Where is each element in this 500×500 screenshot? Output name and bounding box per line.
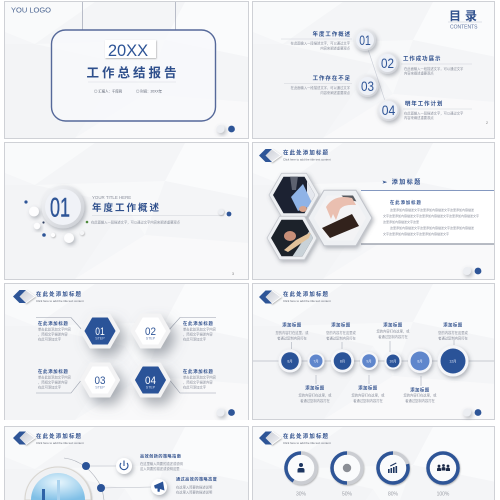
step 2 text bbox=[183, 320, 217, 342]
slide header: 在此处添加标题 bbox=[283, 148, 329, 156]
top labels: 您的内容打在这里或 bbox=[326, 330, 357, 335]
timeline node 2: 7月 bbox=[313, 360, 319, 364]
ring 50% bbox=[332, 453, 362, 498]
timeline node 7: 12月 bbox=[449, 360, 457, 364]
cover title: 工作总结报告 bbox=[86, 65, 180, 80]
item 04: 04 bbox=[382, 102, 395, 118]
step 4 text: 在此可添加文字 bbox=[183, 384, 207, 390]
step 04 hexagon: 04 bbox=[145, 375, 156, 387]
photo: suit with folder bbox=[269, 173, 319, 217]
item 02: 工作成功展示 bbox=[403, 54, 441, 62]
top labels: 者通过复制内容打在 bbox=[277, 336, 308, 340]
item 01: 01 bbox=[359, 32, 371, 48]
icon: megaphone bbox=[151, 479, 167, 495]
step 2 text: 单击此处添加文字内容 bbox=[183, 326, 217, 332]
step 3 text: 单击此处添加文字内容 bbox=[38, 374, 72, 380]
timeline node 5 bbox=[384, 352, 402, 370]
top labels: 您的内容打在这里或 bbox=[438, 330, 469, 335]
text card: 这里添加内容描述文字这里 bbox=[383, 219, 419, 224]
ring 100% bbox=[428, 453, 458, 498]
decorative dots bbox=[463, 408, 481, 416]
top labels: 添加标题 bbox=[282, 322, 302, 328]
title frame bbox=[52, 30, 216, 121]
step 02 hexagon: STEP bbox=[146, 336, 156, 340]
bottom labels: 者通过复制内容打在 bbox=[300, 398, 331, 403]
item text 1 bbox=[140, 452, 184, 471]
step 03 hexagon: STEP bbox=[95, 386, 105, 390]
step 03 hexagon: 03 bbox=[94, 375, 106, 387]
step 03 hexagon bbox=[81, 364, 119, 396]
top labels: 您的内容打在这里，或 bbox=[276, 330, 309, 335]
top labels: 者通过复制内容打在 bbox=[326, 336, 357, 340]
item 01: 年度工作概述 bbox=[313, 30, 351, 38]
decorative dots bbox=[216, 125, 235, 133]
item 03: 内容来阐述重要观点 bbox=[320, 90, 351, 95]
section dots bbox=[218, 209, 231, 216]
step 1 text: 单击此处添加文字内容 bbox=[38, 326, 72, 332]
item text 1: 这入简要的描述或说明这里 bbox=[140, 466, 180, 471]
slide header bbox=[259, 290, 331, 304]
step 01 hexagon bbox=[81, 314, 119, 348]
section heading: YOUR TITLE HERE bbox=[92, 195, 131, 200]
timeline node 1: 8月 bbox=[287, 360, 293, 364]
bottom labels: 您的内容打在这里，或 bbox=[299, 392, 332, 398]
timeline node 4: 9月 bbox=[366, 360, 372, 364]
timeline node 3 bbox=[331, 350, 354, 372]
top labels bbox=[276, 322, 469, 340]
panel: section divider slide bbox=[4, 142, 248, 280]
step 1 text bbox=[38, 320, 72, 342]
section description: 在此面输入一段描述文字，可以通过文字内容来阐述重要观点 bbox=[91, 220, 181, 224]
slide header: Click here to add the title text content bbox=[283, 158, 331, 162]
step 4 text: 在此添加标题 bbox=[183, 368, 214, 375]
icon: power bbox=[116, 458, 132, 474]
slide header bbox=[259, 432, 331, 445]
timeline node 5: 10月 bbox=[389, 360, 397, 364]
panel: photo slide bbox=[252, 142, 496, 280]
step 2 text: 在此可添加文字 bbox=[183, 336, 207, 342]
item 04: 内容来阐述重要观点 bbox=[404, 115, 434, 120]
item 02 bbox=[376, 52, 472, 76]
text card: 这里添加内容描述文字这里添加内容描述文字这里添加内容描述 bbox=[390, 207, 474, 212]
text card: 文字这里添加内容描述文字这里添加内容描述文字这里添加内容描述文字 bbox=[383, 213, 479, 218]
item 02: 在此面输入一段描述文字，可以通过文字 bbox=[404, 66, 464, 71]
orbit arc bbox=[64, 458, 104, 500]
top labels: 您的内容打在这里，或 bbox=[377, 328, 410, 334]
slide header: 在此处添加标题 bbox=[283, 432, 329, 440]
ring 80% bbox=[378, 453, 408, 498]
icon: team bbox=[437, 464, 450, 471]
item 04 bbox=[378, 99, 472, 121]
reporter and date bbox=[94, 88, 163, 94]
ring 30% bbox=[286, 453, 316, 498]
top labels: 添加标题 bbox=[383, 322, 403, 328]
step 4 text: ，简短文字描述内容 bbox=[183, 380, 213, 384]
text card: 文字这里添加内容描述文字这里添加内容描述文字 bbox=[383, 231, 449, 236]
timeline node 4 bbox=[360, 352, 378, 370]
connectors bbox=[86, 466, 152, 488]
step 3 text: 在此添加标题 bbox=[38, 368, 69, 375]
slide header: 在此处添加标题 bbox=[283, 290, 329, 298]
item text 1: 在这里输入简要的描述或说明 bbox=[140, 461, 184, 466]
slide header bbox=[259, 148, 331, 162]
slide header: Click here to add the title text content bbox=[283, 299, 331, 303]
page number: 2 bbox=[486, 121, 488, 125]
section number disc: 01 bbox=[50, 192, 70, 222]
panel: percentage rings slide bbox=[252, 426, 496, 500]
panel: strategy slide bbox=[4, 426, 248, 500]
step 1 text: ，简短文字描述内容 bbox=[38, 332, 68, 336]
step 01 hexagon: STEP bbox=[95, 336, 105, 340]
slide header: 在此处添加标题 bbox=[36, 432, 82, 440]
contents heading bbox=[448, 9, 482, 30]
photo: handshake bbox=[267, 216, 317, 260]
step 2 text: 在此添加标题 bbox=[183, 320, 214, 327]
decorative dots bbox=[463, 267, 481, 275]
section heading: 年度工作概述 bbox=[92, 202, 161, 214]
panel: contents slide bbox=[252, 2, 496, 138]
step 04 hexagon bbox=[132, 364, 170, 396]
top labels: 添加标题 bbox=[331, 322, 351, 328]
step 3 text bbox=[38, 368, 72, 390]
step 1 text: 在此添加标题 bbox=[38, 320, 69, 327]
reporter and date: ◎ 时间：20XX年 bbox=[136, 88, 163, 94]
ring 80%: 80% bbox=[388, 492, 399, 498]
subheading: ➢ 添加标题 bbox=[382, 178, 422, 186]
timeline node 6 bbox=[408, 349, 432, 373]
slide header: 在此处添加标题 bbox=[36, 290, 82, 298]
item 03: 工作存在不足 bbox=[313, 74, 351, 82]
item 03 bbox=[284, 74, 378, 97]
top labels: 者通过复制内容打在 bbox=[378, 334, 409, 339]
bottom labels: 者通过复制内容打在 bbox=[353, 398, 384, 403]
item 04: 在此面输入一段描述文字，可以通过文字 bbox=[404, 110, 464, 116]
photo: hand on tablet bbox=[308, 190, 372, 246]
item 01: 内容来阐述重要观点 bbox=[320, 46, 351, 50]
step 04 hexagon: STEP bbox=[146, 386, 156, 390]
step 3 text: 在此可添加文字 bbox=[38, 384, 62, 390]
orbit nodes bbox=[82, 462, 105, 492]
year box: 20XX bbox=[108, 42, 148, 60]
connector lines bbox=[36, 318, 216, 393]
item 03: 03 bbox=[361, 78, 374, 94]
item text 2: 通过高效的策略态度 bbox=[176, 476, 217, 482]
contents heading: CONTENTS bbox=[450, 24, 478, 30]
section heading bbox=[92, 195, 161, 214]
timeline axis bbox=[253, 360, 494, 362]
bottom labels: 添加标题 bbox=[410, 386, 430, 394]
timeline node 7 bbox=[438, 346, 468, 376]
panel: timeline slide bbox=[252, 284, 496, 420]
top labels: 添加标题 bbox=[443, 322, 463, 328]
hanging lines bbox=[82, 2, 176, 30]
timeline node 6: 8月 bbox=[417, 360, 423, 364]
step 1 text: 在此可添加文字 bbox=[38, 336, 62, 342]
step 4 text: 单击此处添加文字内容 bbox=[183, 374, 217, 380]
page number: 3 bbox=[232, 272, 234, 276]
bottom labels: 添加标题 bbox=[305, 384, 325, 392]
section number disc bbox=[42, 186, 84, 228]
text card: 在此添加标题 bbox=[390, 199, 422, 206]
slide header: Click here to add the title text content bbox=[36, 441, 84, 445]
item 01: 在此面输入一段描述文字，可以通过文字 bbox=[291, 40, 351, 46]
item text 2: 在这里入简要的描述说明 bbox=[176, 484, 213, 490]
reporter and date: ◎ 汇报人：千库网 bbox=[94, 88, 123, 94]
bottom labels: 您的内容打在这里，或 bbox=[404, 392, 437, 398]
step 02 hexagon: 02 bbox=[145, 326, 156, 338]
top labels: 者通过复制内容打在 bbox=[438, 336, 469, 340]
item text 2 bbox=[176, 476, 217, 494]
step 4 text bbox=[183, 368, 217, 390]
step 02 hexagon bbox=[132, 314, 170, 348]
item 01 bbox=[281, 29, 376, 51]
bottom labels bbox=[299, 384, 437, 403]
connector ticks bbox=[292, 340, 454, 386]
icon: pie bbox=[343, 464, 351, 472]
text card bbox=[361, 190, 494, 244]
bubbles bbox=[24, 200, 84, 243]
slide header: Click here to add the title text content bbox=[283, 441, 331, 445]
slide header bbox=[13, 290, 84, 303]
step 3 text: ，简短文字描述内容 bbox=[38, 380, 68, 384]
bottom labels: 添加标题 bbox=[358, 384, 378, 392]
slide header bbox=[13, 432, 84, 445]
item text 1: 高效创新的策略指南 bbox=[140, 452, 181, 458]
ring 100%: 100% bbox=[437, 492, 450, 498]
panel: cover slide bbox=[4, 2, 248, 138]
bottom labels: 者通过复制内容打在 bbox=[405, 398, 436, 403]
panel: four steps slide bbox=[4, 284, 248, 420]
item 02: 内容来阐述重要观点 bbox=[404, 70, 434, 76]
text card: 这里添加内容描述文字这里添加内容描述文字这里添加内容描述 bbox=[390, 225, 474, 230]
decorative dots bbox=[216, 408, 235, 416]
ring 30%: 30% bbox=[296, 492, 307, 498]
item 02: 02 bbox=[381, 55, 394, 71]
slide header: Click here to add the title text content bbox=[36, 299, 84, 303]
icon: bars bbox=[388, 462, 397, 473]
item 04: 明年工作计划 bbox=[405, 100, 443, 108]
logo text: YOU LOGO bbox=[11, 6, 51, 14]
step 01 hexagon: 01 bbox=[95, 326, 105, 338]
item text 2: 在这里入简要的描述说明 bbox=[176, 490, 213, 494]
timeline node 1 bbox=[278, 350, 302, 372]
timeline node 3: 8月 bbox=[340, 360, 345, 364]
item 03: 在此面输入一段描述文字，可以通过文字 bbox=[291, 85, 351, 90]
step 2 text: ，简短文字描述内容 bbox=[183, 332, 213, 336]
bottom labels: 您的内容打在这里，或 bbox=[352, 392, 385, 398]
photo circle bbox=[25, 467, 91, 500]
timeline node 2 bbox=[308, 352, 324, 370]
icon: person bbox=[298, 463, 304, 472]
ring 50%: 50% bbox=[342, 492, 353, 498]
contents heading: 目录 bbox=[449, 9, 481, 23]
